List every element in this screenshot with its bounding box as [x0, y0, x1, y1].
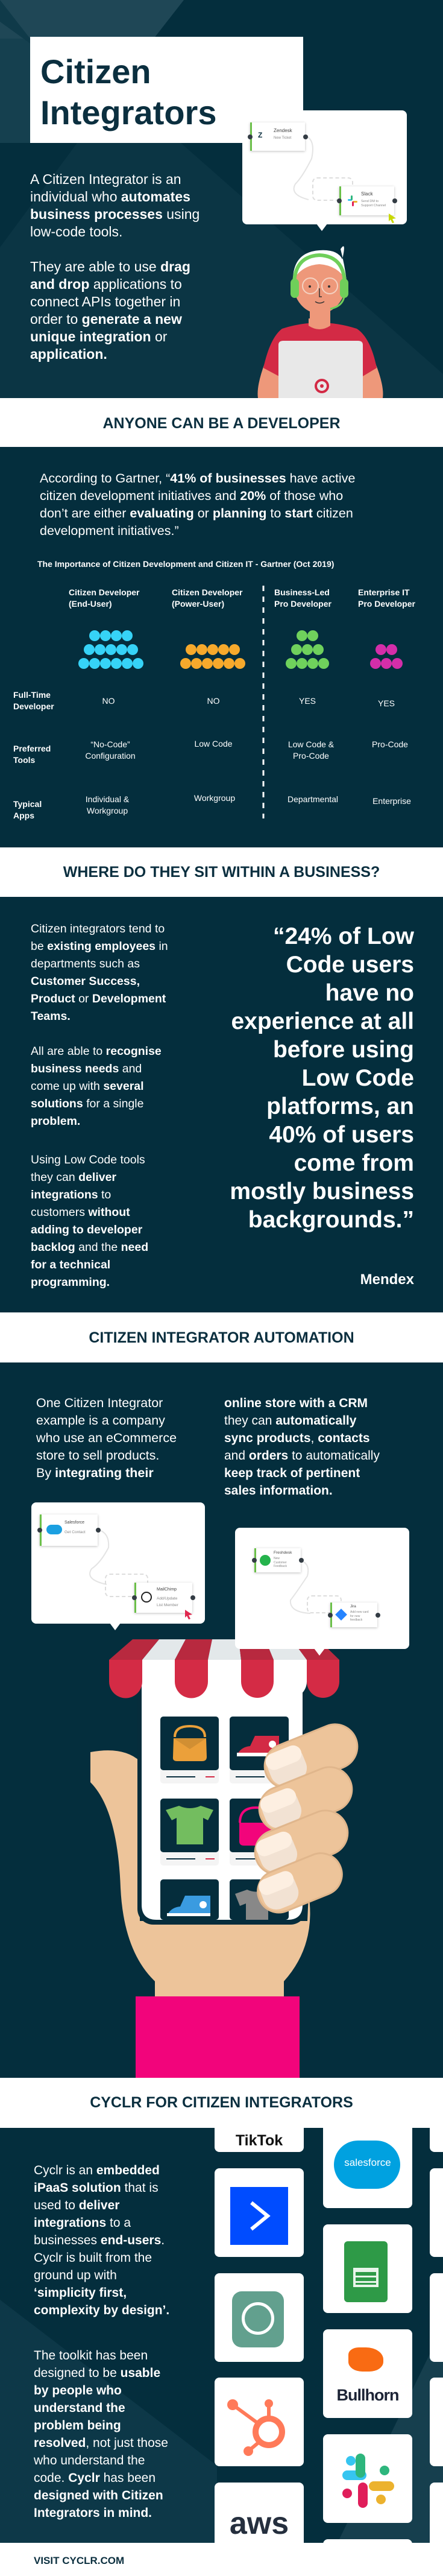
section: where they sit: come up with several	[31, 1080, 144, 1093]
quote: mendex: before using	[273, 1037, 414, 1063]
logo: google sheets	[323, 2224, 412, 2313]
text: left column: departments such as	[31, 957, 140, 970]
quote: mendex: experience at all	[231, 1008, 414, 1034]
chart: developer comparison: Low Code &	[288, 739, 334, 749]
text: automation right column: online store with a CRM	[224, 1396, 368, 1410]
logo: aws: aws	[230, 2506, 289, 2541]
text: intro paragraph 2: unique integration or	[30, 329, 167, 344]
heading: anyone can be a developer: ANYONE CAN BE A DEVELOPER	[102, 415, 341, 432]
quote: mendex: have no	[325, 980, 414, 1006]
text: cyclr paragraph 1: Cyclr is built from the	[34, 2251, 152, 2265]
chart: developer comparison: NO	[207, 696, 219, 706]
section: where they sit: All are able to recognise	[31, 1045, 162, 1058]
section: developer types	[0, 447, 443, 847]
text: automation left column: store to sell products.	[36, 1448, 159, 1463]
text: intro paragraph 2: order to generate a new	[30, 311, 182, 327]
text: automation right column: sync products, contacts	[224, 1431, 370, 1445]
chart: developer comparison: (End-User)	[69, 599, 112, 609]
chart: developer comparison: Enterprise IT	[358, 587, 410, 597]
chart: developer comparison: (Power-User)	[172, 599, 224, 609]
text: cyclr paragraph 1: used to deliver	[34, 2198, 119, 2212]
chart: developer comparison: Departmental	[287, 794, 338, 804]
heading: citizen integrator automation: CITIZEN INTEGRATOR AUTOMATION	[89, 1329, 354, 1346]
text: automation left column: who use an eCommerce	[36, 1431, 177, 1445]
logo: tiktok: TikTok	[236, 2132, 283, 2149]
head	[293, 251, 346, 314]
text: left column: Teams.	[31, 1010, 71, 1023]
logo grid	[215, 2128, 443, 2543]
section: where they sit: integrations to	[31, 1188, 111, 1201]
icon: cursor	[389, 214, 396, 223]
text: cyclr paragraph 2: The toolkit has been	[34, 2349, 148, 2362]
quote: mendex	[230, 923, 414, 1233]
section: hero	[0, 0, 443, 398]
chart: developer comparison: Pro Developer	[274, 599, 331, 609]
quote: mendex: Low Code	[302, 1065, 414, 1091]
chart: developer comparison	[13, 586, 415, 820]
text: gartner quote	[40, 471, 355, 538]
logo: slack	[323, 2434, 412, 2523]
chart: developer comparison: Citizen Developer	[172, 587, 242, 597]
chart: developer comparison: Developer	[13, 701, 54, 711]
chart: developer comparison: YES	[378, 698, 395, 708]
section: where they sit	[0, 897, 443, 1312]
text: cyclr paragraph 2: designed to be usable	[34, 2366, 160, 2380]
title box: Integrators	[40, 93, 217, 131]
text: cyclr paragraph 2: resolved, not just those	[34, 2436, 168, 2450]
section: where they sit: they can deliver	[31, 1171, 116, 1184]
illustration: person at laptop	[258, 246, 383, 398]
node: salesforce: Get Contact	[64, 1530, 86, 1534]
quote: mendex: backgrounds.”	[248, 1207, 414, 1233]
node: mailchimp: List Member	[157, 1603, 178, 1607]
heading: cyclr for citizen integrators: CYCLR FOR CITIZEN INTEGRATORS	[90, 2094, 353, 2111]
node: zendesk: New Ticket	[274, 136, 291, 140]
quote: mendex: 40% of users	[269, 1122, 414, 1148]
text: automation left column: One Citizen Integrator	[36, 1396, 163, 1410]
logo: aws	[215, 2483, 304, 2571]
text: intro paragraph 1	[30, 171, 200, 239]
chart: developer comparison: Citizen Developer	[69, 587, 139, 597]
text: intro paragraph 1: low-code tools.	[30, 224, 122, 239]
node: freshdesk: Feedback	[274, 1565, 287, 1568]
logo: hubspot	[215, 2378, 304, 2466]
text: intro paragraph 1: A Citizen Integrator is an	[30, 171, 181, 187]
text: intro paragraph 2: and drop applications to	[30, 276, 182, 292]
glasses	[303, 278, 318, 294]
chart: developer comparison: Apps	[13, 811, 34, 820]
node: mailchimp: Add/Update	[157, 1597, 177, 1601]
chart: developer comparison: NO	[102, 696, 115, 706]
node: mailchimp: MailChimp	[157, 1587, 177, 1592]
section: where they sit: backlog and the need	[31, 1241, 148, 1254]
text: left column: Customer Success,	[31, 975, 140, 988]
fingers	[248, 1718, 364, 1919]
quote: mendex: Code users	[286, 952, 414, 978]
section: where they sit: problem.	[31, 1115, 80, 1128]
chart: developer comparison: Typical	[13, 799, 42, 809]
logo: activecampaign	[215, 2168, 304, 2257]
chart: developer comparison: Enterprise	[372, 796, 411, 806]
node: jira: Jira	[350, 1605, 356, 1609]
chart: developer comparison: Pro-Code	[293, 751, 329, 761]
logo: bullhorn: Bullhorn	[336, 2386, 398, 2404]
text: cyclr paragraph 1: iPaaS solution that is	[34, 2181, 159, 2195]
products	[175, 1726, 205, 1737]
text: automation right column: keep track of pertinent	[224, 1466, 360, 1480]
node: salesforce: Salesforce	[64, 1521, 84, 1525]
node: mailchimp	[134, 1583, 192, 1613]
neck	[310, 302, 330, 326]
heading: where do they sit: WHERE DO THEY SIT WITHIN A BUSINESS?	[63, 864, 380, 881]
chart: developer comparison: Full-Time	[13, 690, 51, 700]
text: automation left column: example is a company	[36, 1413, 165, 1428]
text: cyclr paragraph 2: problem being	[34, 2419, 121, 2432]
section: where they sit: for a technical	[31, 1258, 110, 1271]
text: intro paragraph 2: They are able to use drag	[30, 259, 190, 274]
text: automation left column: By integrating their	[36, 1466, 154, 1480]
node: freshdesk: Customer	[274, 1561, 287, 1565]
illustration: hand holding phone store	[90, 1639, 358, 2078]
text: cyclr paragraph 2: designed with Citizen	[34, 2489, 163, 2502]
section: where they sit: customers without	[31, 1206, 130, 1219]
node: slack: Send DM to	[361, 200, 379, 203]
text: automation right column	[224, 1396, 380, 1498]
node: zendesk: Z	[258, 131, 262, 139]
text: cyclr paragraph 2: understand the	[34, 2401, 125, 2415]
node: jira: Add new card	[350, 1610, 369, 1614]
chart: developer comparison: Pro Developer	[358, 599, 415, 609]
text: gartner quote: According to Gartner, “41% of businesses have active	[40, 471, 355, 486]
quote: mendex: come from	[294, 1150, 414, 1176]
logo: tiktok	[215, 2063, 304, 2152]
quote: mendex: platforms, an	[266, 1093, 414, 1119]
chart: developer comparison: Tools	[13, 755, 35, 765]
chart title: The Importance of Citizen Development and Citizen IT - Gartner (Oct 2019)	[37, 559, 334, 569]
text: cyclr paragraph 1	[34, 2163, 169, 2317]
section: where they sit: business needs and	[31, 1062, 142, 1075]
card: salesforce to mailchimp	[31, 1502, 205, 1624]
text: intro paragraph 2	[30, 259, 190, 362]
section: where they sit: solutions for a single	[31, 1097, 143, 1110]
node: freshdesk	[254, 1548, 301, 1572]
chart: developer comparison: “No-Code”	[90, 739, 130, 749]
chart: developer comparison: Workgroup	[87, 806, 128, 815]
section: where they sit: programming.	[31, 1276, 110, 1289]
text: automation right column: sales information.	[224, 1484, 333, 1498]
logo: salesforce	[323, 2119, 412, 2208]
text: automation right column: and orders to automatically	[224, 1449, 380, 1463]
node: zendesk	[250, 122, 305, 151]
section: automation example	[0, 1362, 443, 2078]
text: intro paragraph 2: connect APIs together in	[30, 294, 180, 309]
node: jira: feedback	[350, 1618, 362, 1622]
node: slack: Support Channel	[361, 204, 386, 207]
headphones	[294, 255, 345, 288]
node: salesforce	[40, 1514, 98, 1546]
text: cyclr paragraph 2: who understand the	[34, 2454, 145, 2467]
text: automation left column	[36, 1396, 177, 1480]
text: gartner quote: don’t are either evaluating or planning to start citizen	[40, 506, 353, 521]
chart: developer comparison: YES	[299, 696, 316, 706]
text: cyclr paragraph 2: by people who	[34, 2384, 122, 2397]
section: where they sit: Mendex	[360, 1271, 414, 1288]
footer: VISIT CYCLR.COM	[34, 2555, 124, 2566]
node: slack: Slack	[361, 191, 373, 197]
section: where they sit: Using Low Code tools	[31, 1153, 145, 1166]
title box: Citizen	[40, 52, 151, 90]
text: cyclr paragraph 1: ground up with	[34, 2268, 117, 2282]
card: freshdesk to jira	[235, 1528, 409, 1649]
laptop	[278, 341, 363, 398]
chart: developer comparison: Pro-Code	[372, 739, 408, 749]
quote: mendex: mostly business	[230, 1179, 414, 1204]
text: cyclr paragraph 2: Integrators in mind.	[34, 2506, 152, 2520]
logo: bullhorn	[323, 2329, 412, 2418]
text: cyclr paragraph 1: ‘simplicity first,	[34, 2286, 127, 2300]
text: intro paragraph 2: application.	[30, 346, 107, 362]
text: intro paragraph 1: individual who automates	[30, 189, 190, 204]
node: zendesk: Zendesk	[274, 128, 292, 133]
section: where they sit: adding to developer	[31, 1223, 142, 1236]
card: zendesk to slack integration	[242, 110, 407, 224]
text: gartner quote: development initiatives.”	[40, 524, 179, 538]
text: cyclr paragraph 2: code. Cyclr has been	[34, 2471, 156, 2485]
title box	[30, 37, 303, 143]
node: freshdesk: New	[274, 1557, 280, 1560]
section: cyclr	[0, 2128, 443, 2543]
text: cyclr paragraph 1: complexity by design’.	[34, 2303, 169, 2317]
arms	[258, 362, 283, 398]
text: cyclr paragraph 2	[34, 2349, 168, 2520]
text: cyclr paragraph 1: Cyclr is an embedded	[34, 2163, 160, 2177]
chart: developer comparison: Configuration	[85, 751, 136, 761]
logo: salesforce: salesforce	[344, 2157, 391, 2168]
text: intro paragraph 1: business processes using	[30, 206, 200, 222]
node: slack	[339, 186, 394, 215]
text: cyclr paragraph 1: integrations to a	[34, 2216, 131, 2230]
text: gartner quote: citizen development initiatives and 20% of those who	[40, 489, 343, 503]
quote: mendex: “24% of Low	[273, 923, 414, 949]
chart: developer comparison: Workgroup	[194, 793, 235, 803]
node: jira: for new	[350, 1614, 360, 1618]
text: left column: be existing employees in	[31, 940, 168, 953]
chart: developer comparison: Individual &	[86, 794, 129, 804]
text: left column	[31, 922, 168, 1023]
logo: chatgpt	[215, 2273, 304, 2362]
text: cyclr paragraph 1: businesses end-users.	[34, 2233, 165, 2247]
chart: developer comparison: Business-Led	[274, 587, 330, 597]
text: left column: Citizen integrators tend to	[31, 922, 165, 935]
chart: developer comparison: Preferred	[13, 744, 51, 753]
node: freshdesk: Freshdesk	[274, 1551, 292, 1555]
awning	[109, 1639, 339, 1698]
text: automation right column: they can automatically	[224, 1414, 356, 1428]
text: left column: Product or Development	[31, 992, 166, 1005]
node: jira	[330, 1603, 377, 1627]
shirt	[263, 323, 377, 398]
chart: developer comparison: Low Code	[194, 739, 233, 748]
